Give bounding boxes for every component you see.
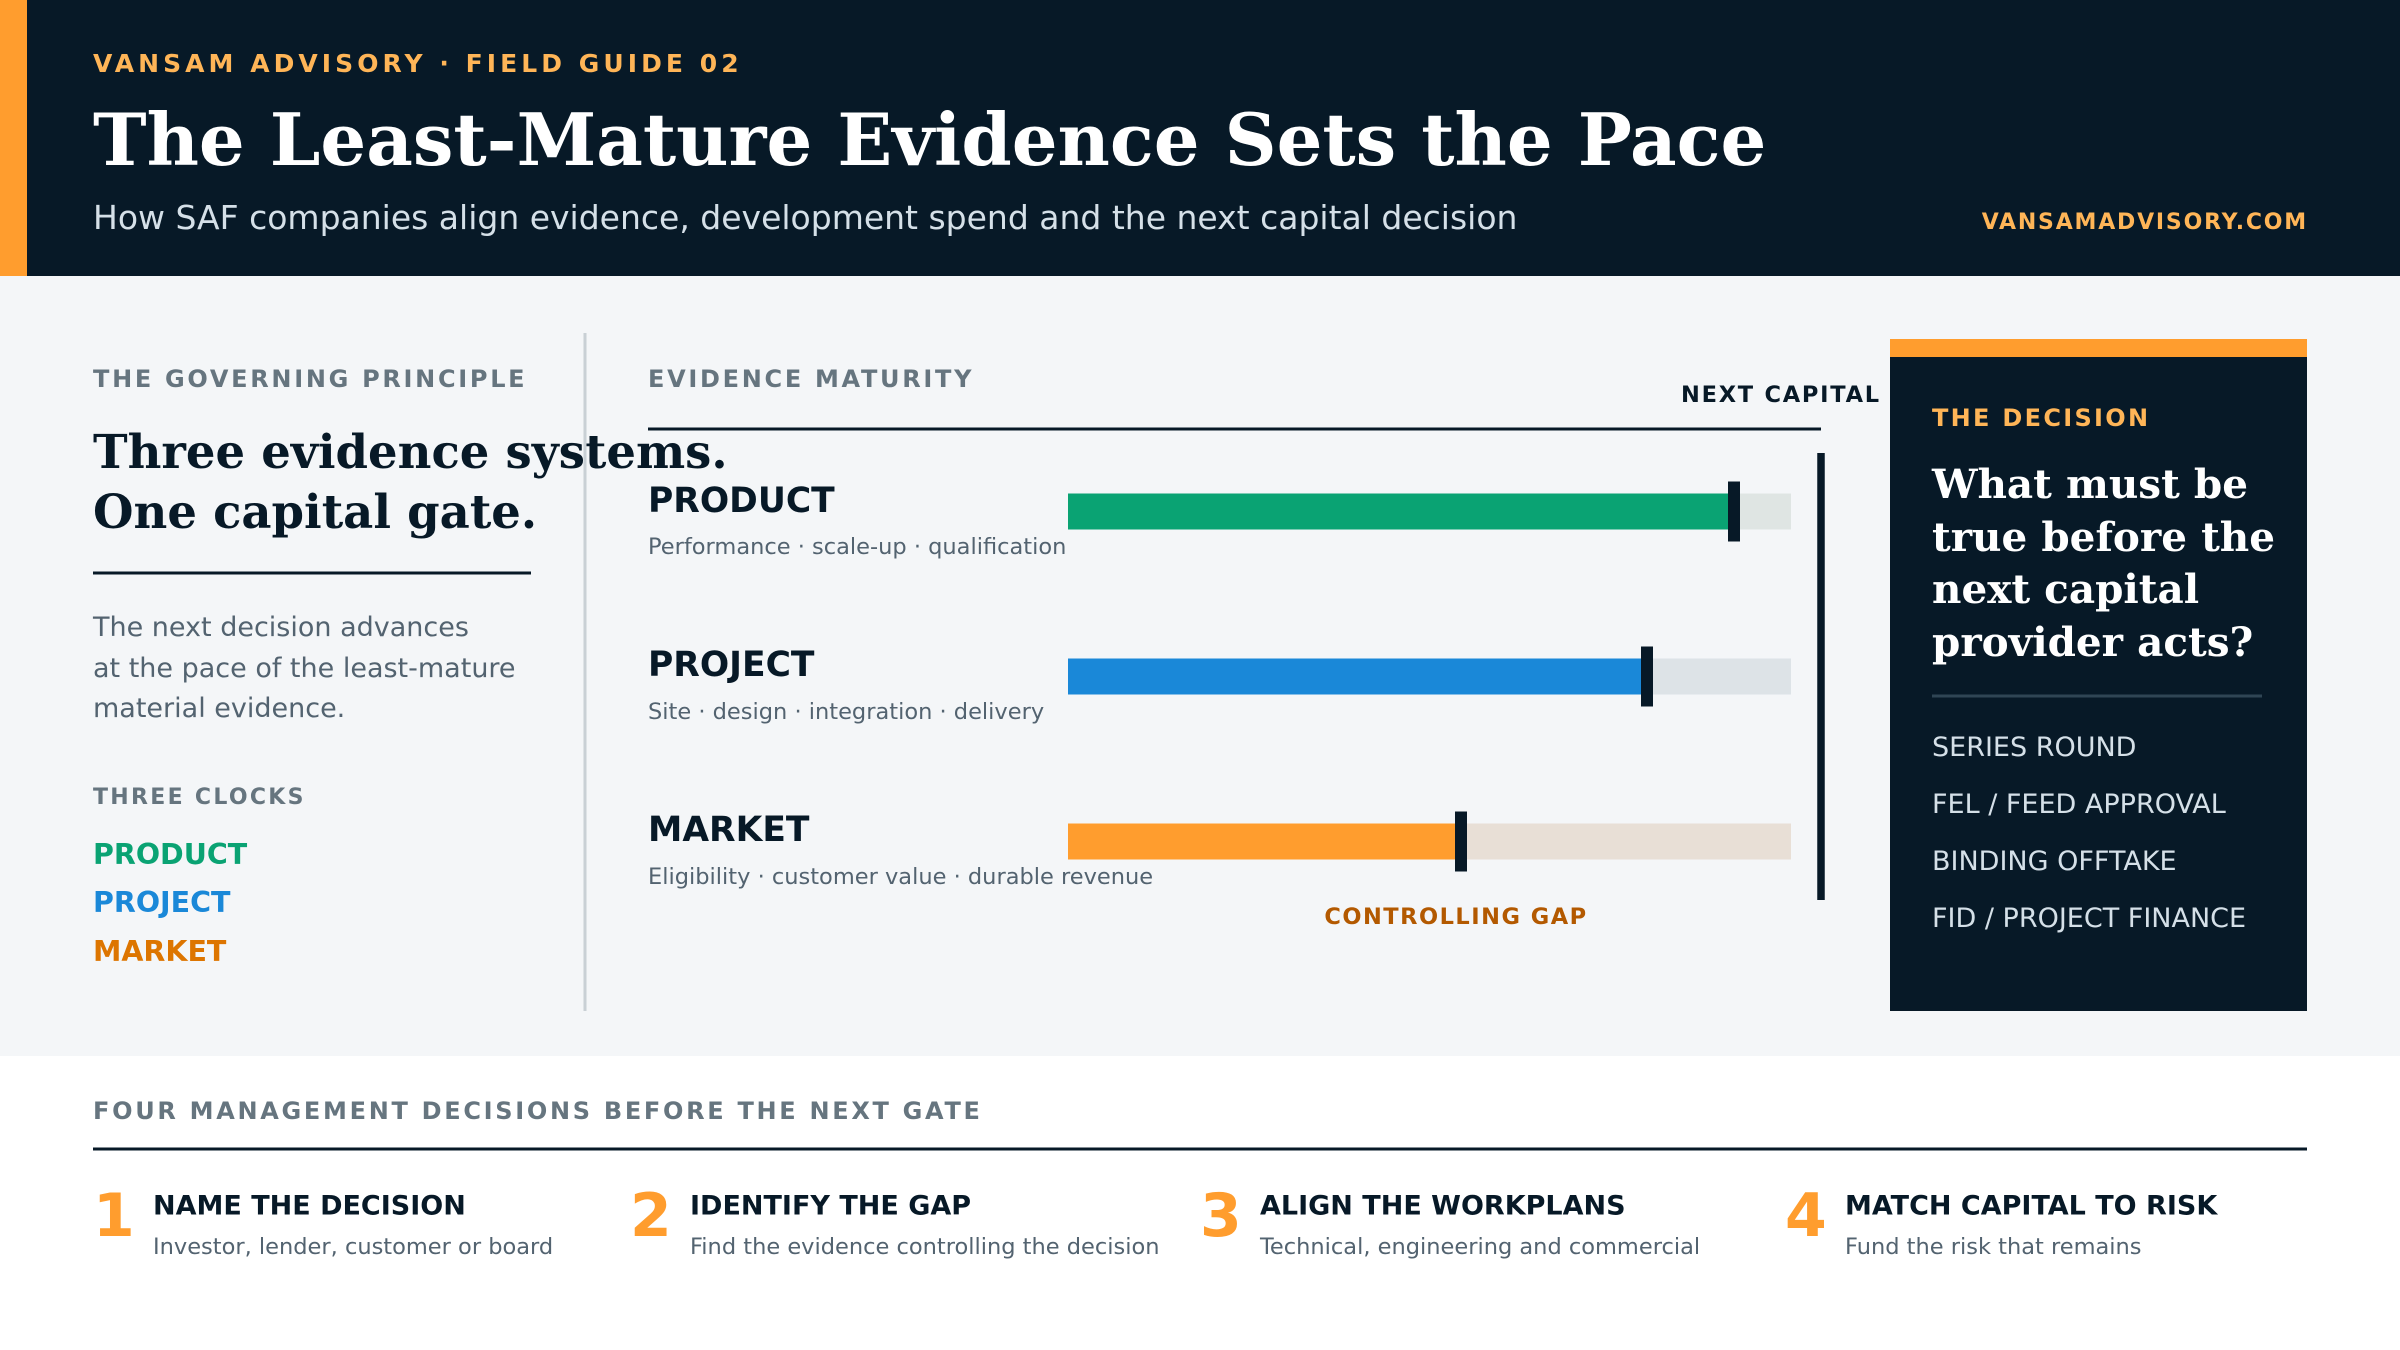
step 3 — [1200, 1181, 1700, 1260]
principle body text: The next decision advances — [92, 612, 469, 643]
panel: the decision — [1890, 339, 2307, 1011]
three clocks list: PRODUCT — [93, 838, 248, 871]
title: The Least-Mature Evidence Sets the Pace — [93, 97, 1766, 182]
step 3: 3 — [1200, 1181, 1242, 1251]
step 2 — [630, 1181, 1160, 1260]
subtitle: How SAF companies align evidence, development spend and the next capital decision — [93, 198, 1517, 237]
step 4: MATCH CAPITAL TO RISK — [1845, 1190, 2218, 1222]
capital events list: BINDING OFFTAKE — [1932, 846, 2177, 877]
panel: evidence maturity chart — [648, 365, 1881, 930]
row: market: MARKET — [648, 810, 810, 850]
step 1: Investor, lender, customer or board — [153, 1234, 553, 1260]
row: project: Site · design · integration · delivery — [648, 699, 1044, 725]
step 2: IDENTIFY THE GAP — [690, 1190, 971, 1222]
panel: header — [0, 0, 2400, 276]
chart label: EVIDENCE MATURITY — [648, 365, 974, 393]
next capital label: NEXT CAPITAL — [1681, 382, 1881, 408]
three clocks list: MARKET — [93, 935, 227, 968]
principle body text: material evidence. — [93, 693, 345, 724]
capital events list — [1932, 732, 2246, 934]
step 3: ALIGN THE WORKPLANS — [1260, 1190, 1626, 1222]
row: market: Eligibility · customer value · durable revenue — [648, 864, 1153, 890]
row: project — [648, 645, 1791, 725]
principle label: THE GOVERNING PRINCIPLE — [93, 365, 527, 393]
step 3: Technical, engineering and commercial — [1259, 1234, 1700, 1260]
decision question: true before the — [1932, 513, 2275, 561]
row: market — [648, 810, 1791, 890]
panel: main background — [0, 276, 2400, 1056]
row: product — [648, 481, 1791, 560]
step 1 — [93, 1181, 553, 1260]
three clocks list: PROJECT — [93, 886, 231, 919]
step 2: Find the evidence controlling the decision — [690, 1234, 1160, 1260]
step 4: 4 — [1785, 1181, 1827, 1251]
step 4: Fund the risk that remains — [1845, 1234, 2142, 1260]
section heading: FOUR MANAGEMENT DECISIONS BEFORE THE NEXT GATE — [93, 1097, 983, 1125]
row: project: PROJECT — [648, 645, 815, 685]
row: product: Performance · scale-up · qualification — [648, 534, 1066, 560]
principle body text: at the pace of the least-mature — [93, 653, 516, 684]
decision label: THE DECISION — [1932, 404, 2150, 432]
panel: four management decisions — [93, 1097, 2307, 1260]
website: VANSAMADVISORY.COM — [1982, 210, 2308, 235]
decision question: What must be — [1931, 460, 2248, 508]
controlling gap label: CONTROLLING GAP — [1324, 904, 1588, 930]
decision question: provider acts? — [1932, 618, 2253, 666]
principle heading: One capital gate. — [93, 484, 537, 539]
capital events list: FID / PROJECT FINANCE — [1932, 903, 2246, 934]
step 4 — [1785, 1181, 2218, 1260]
step 1: 1 — [93, 1181, 135, 1251]
capital events list: FEL / FEED APPROVAL — [1932, 789, 2226, 820]
three clocks list — [93, 838, 248, 968]
decision question: next capital — [1932, 565, 2199, 613]
principle heading: Three evidence systems. — [93, 424, 728, 479]
eyebrow: VANSAM ADVISORY · FIELD GUIDE 02 — [93, 49, 743, 78]
step 1: NAME THE DECISION — [153, 1190, 466, 1222]
panel: governing principle — [92, 365, 728, 968]
step 2: 2 — [630, 1181, 672, 1251]
next capital gate line — [1817, 453, 1825, 900]
row: product: PRODUCT — [648, 481, 835, 521]
three clocks label: THREE CLOCKS — [93, 785, 306, 810]
capital events list: SERIES ROUND — [1932, 732, 2136, 763]
